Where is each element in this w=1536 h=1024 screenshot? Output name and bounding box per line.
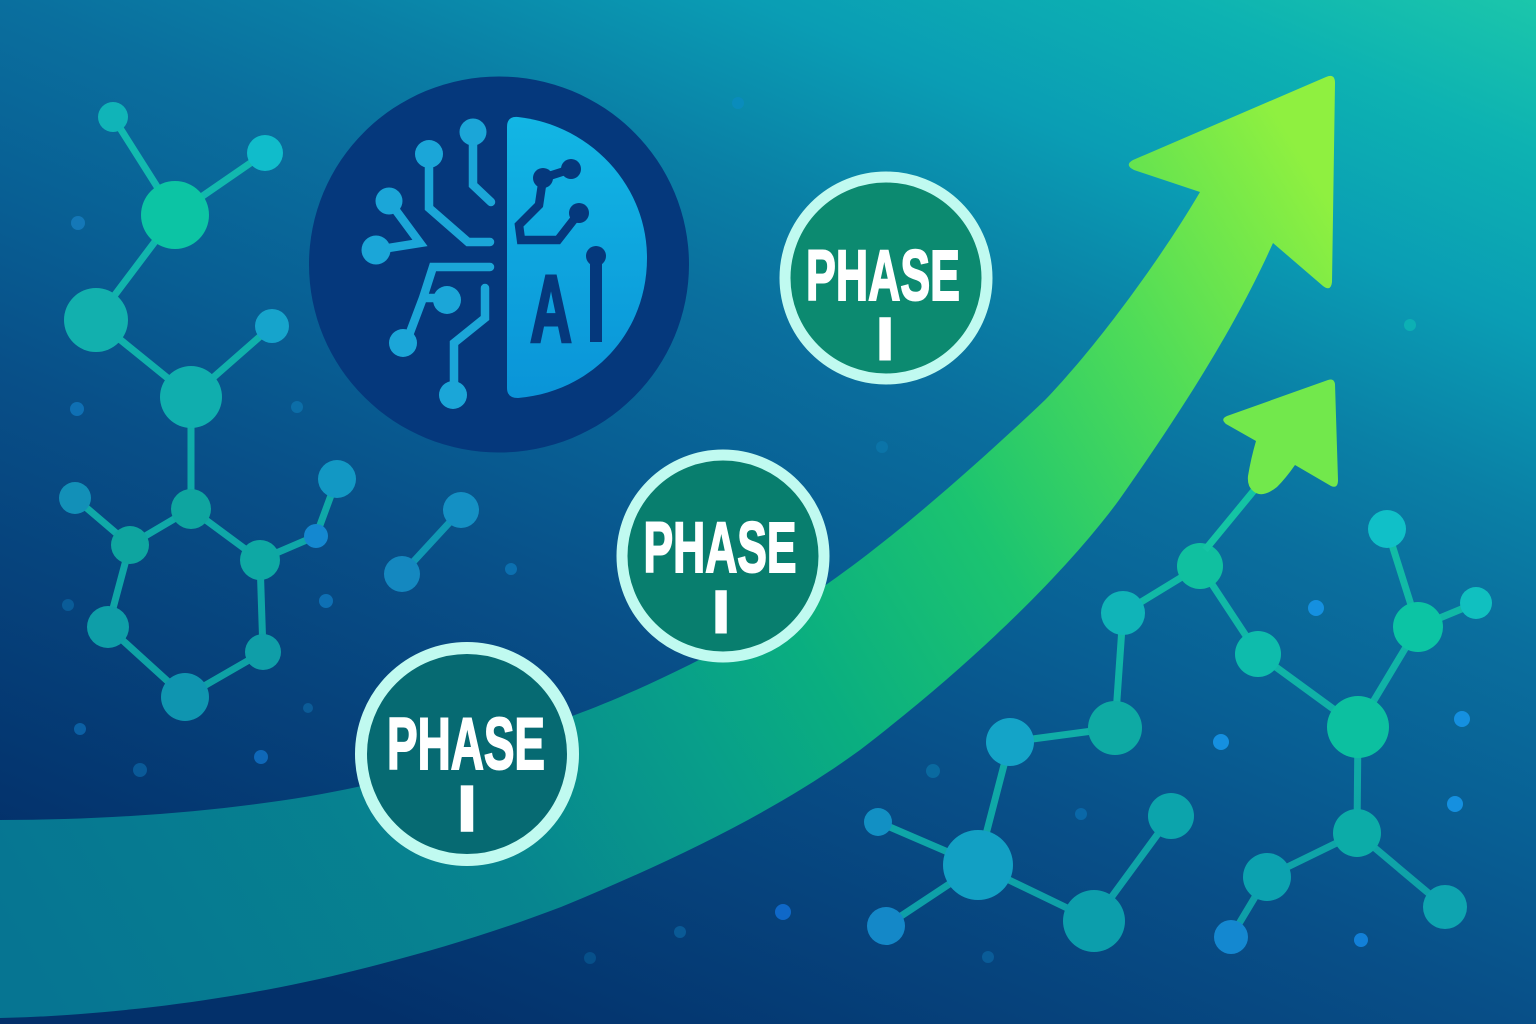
background particle dots	[62, 97, 1470, 964]
AI label: A	[530, 256, 572, 363]
badge: Phase I middle: PHASE	[644, 509, 796, 588]
badge: Phase I lower: PHASE	[387, 704, 545, 785]
badge: Phase I upper: I	[877, 307, 893, 372]
badge: Phase I lower	[361, 648, 573, 860]
badge: Phase I middle	[622, 455, 824, 657]
badge: Phase I lower: I	[458, 775, 476, 844]
molecule: small two-atom	[384, 492, 479, 592]
molecule: lower right cluster	[864, 510, 1492, 954]
arrow: small green arrow rising from molecule	[1205, 380, 1338, 550]
right brain half	[507, 117, 647, 398]
icon: AI brain circuit badge	[309, 76, 689, 452]
badge: Phase I middle: I	[713, 580, 729, 645]
left circuit traces	[362, 118, 491, 409]
right circuit traces	[519, 159, 606, 342]
badge: Phase I upper	[785, 177, 987, 379]
molecule: left cluster	[59, 102, 356, 721]
arrow: large growth swoosh	[0, 76, 1335, 1018]
badge: Phase I upper: PHASE	[806, 237, 960, 316]
